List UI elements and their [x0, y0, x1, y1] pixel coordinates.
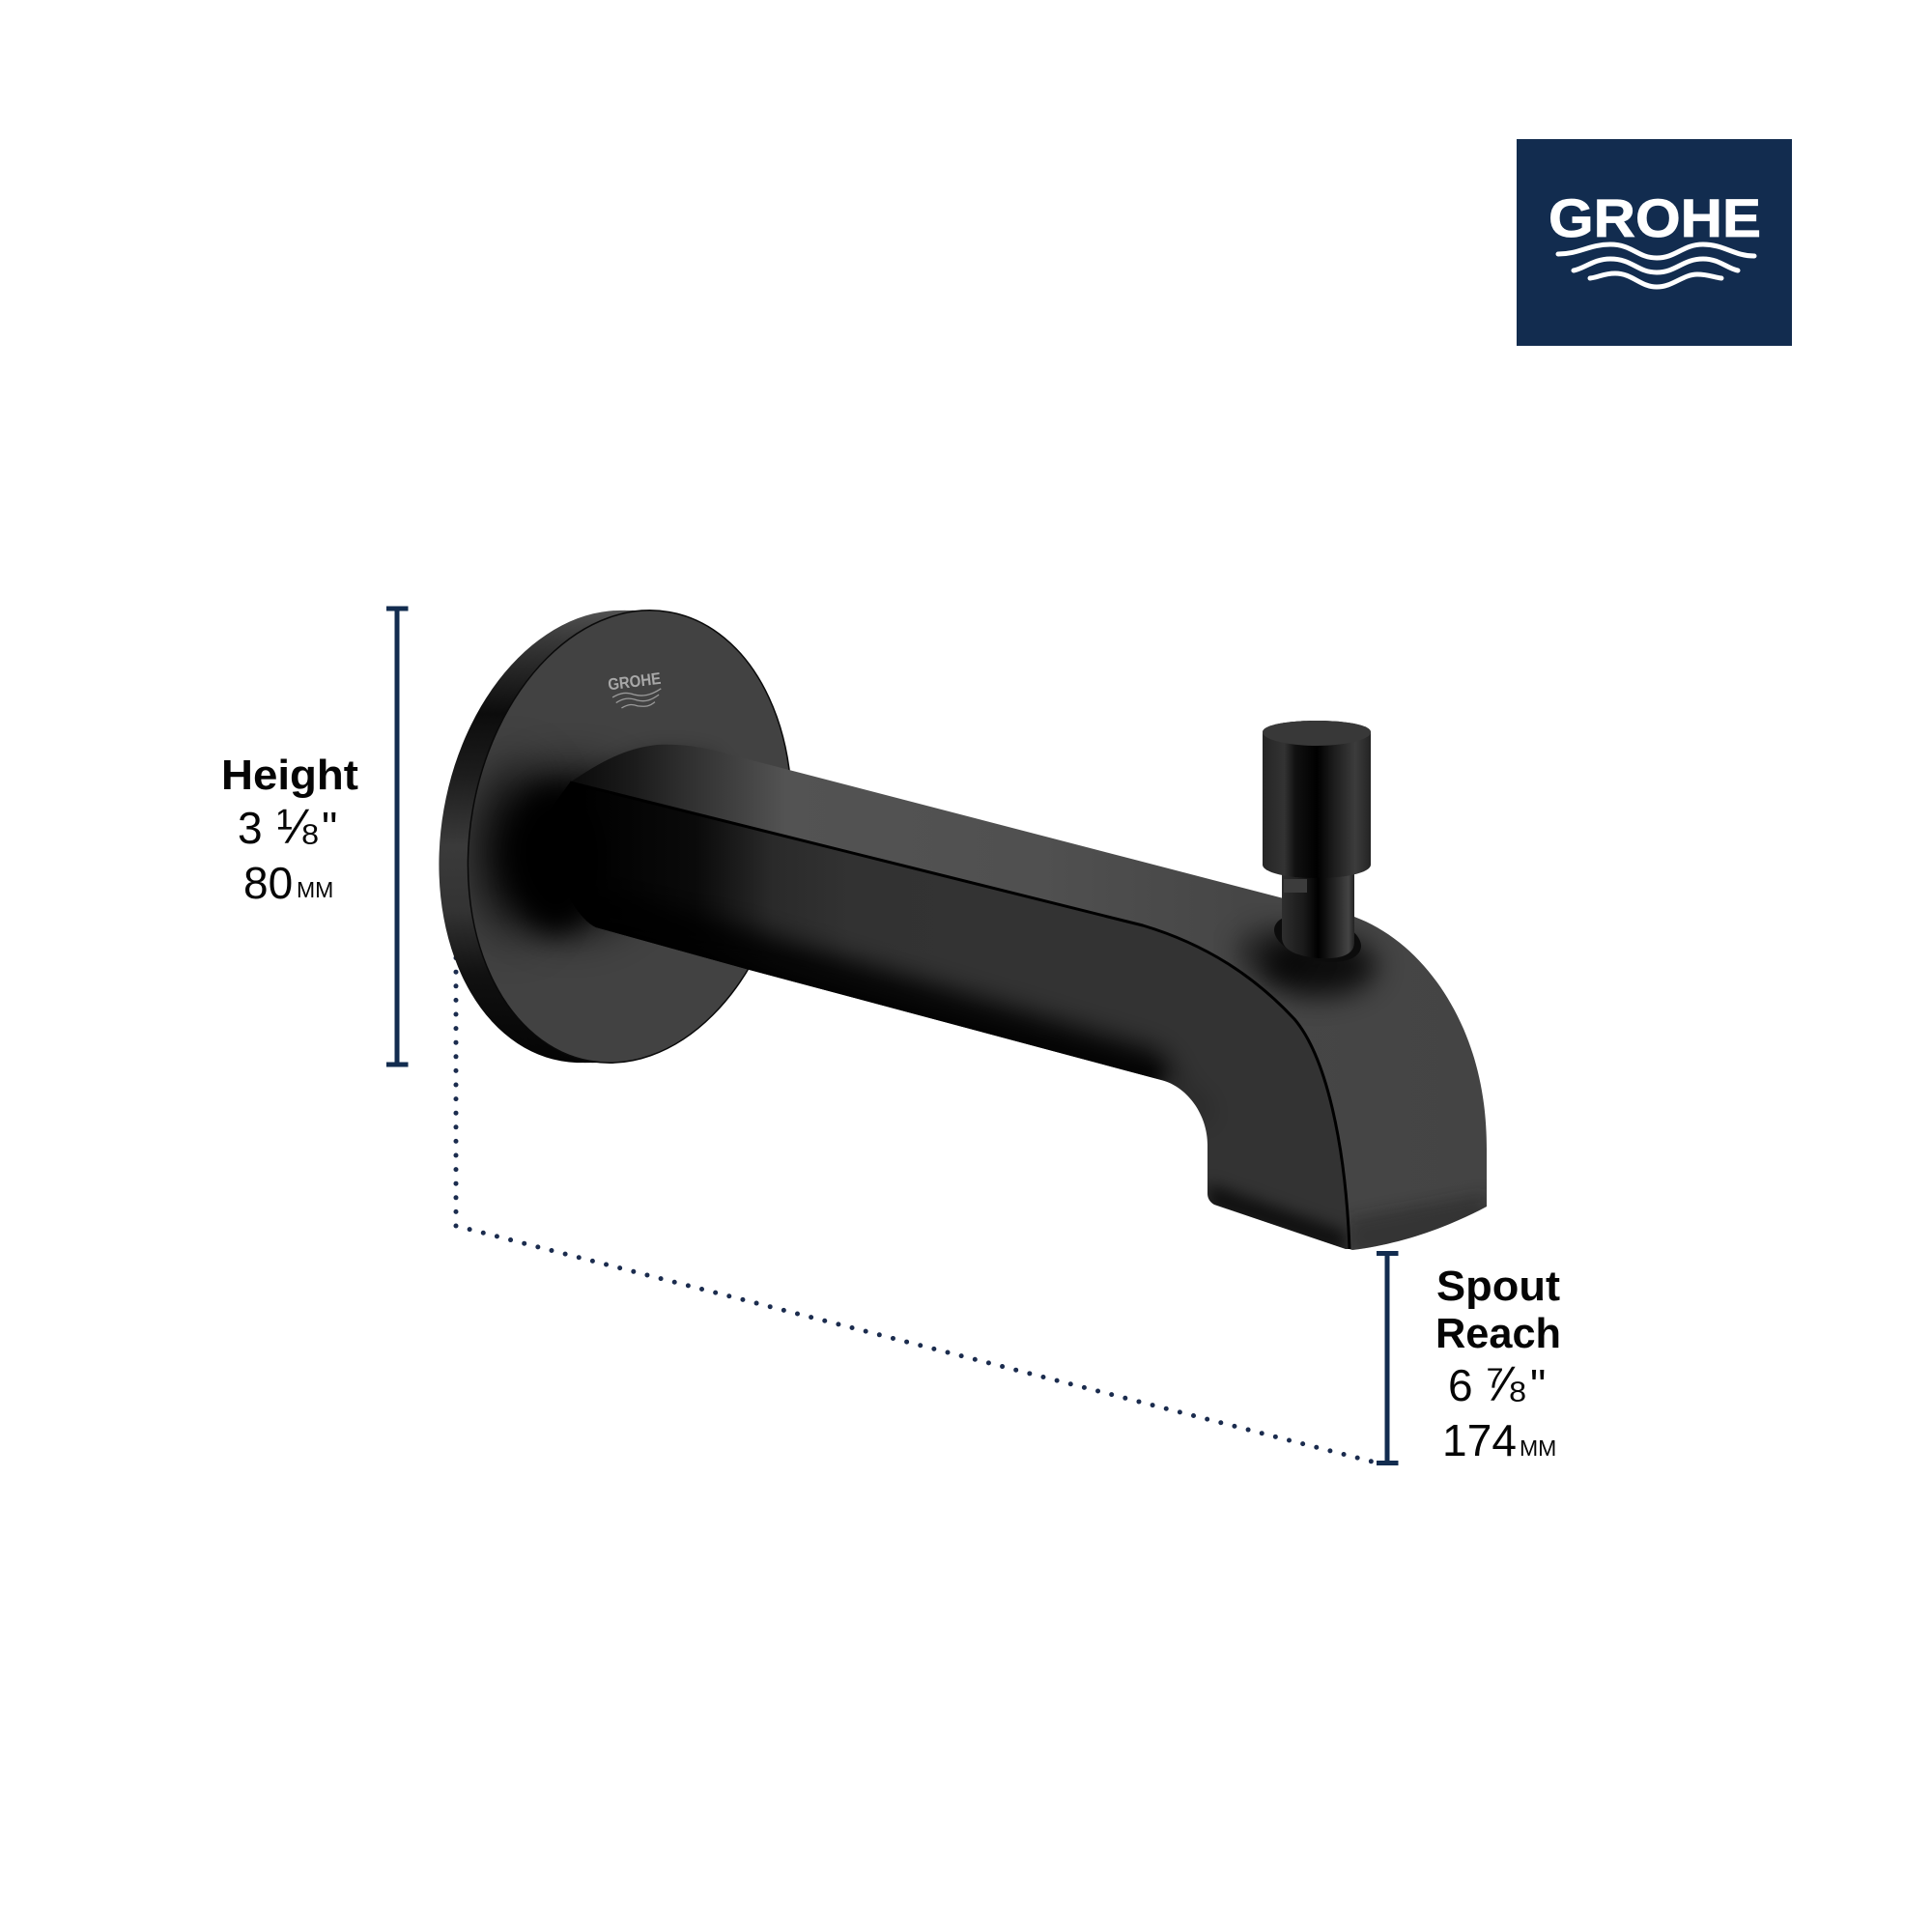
spout top and head face	[560, 734, 1507, 1275]
height label: 3	[238, 803, 263, 853]
spout reach label: 174	[1442, 1415, 1517, 1465]
spout side face	[564, 782, 1349, 1249]
dotted spout reach guide	[456, 944, 1376, 1463]
diverter knob body	[1263, 721, 1371, 878]
spout reach label: Reach	[1435, 1311, 1561, 1357]
disc engraved logo: GROHE	[607, 669, 662, 694]
spout reach label: ⅞	[1484, 1356, 1525, 1411]
logo wordmark: GROHE	[1548, 187, 1761, 248]
diverter stem highlight notch	[1284, 879, 1307, 893]
disc engraved logo	[607, 669, 664, 711]
height dimension bracket	[386, 607, 408, 1066]
height label: ⅛	[276, 799, 318, 854]
spout ridge line	[570, 782, 1350, 1249]
height label: "	[322, 803, 337, 853]
wall disc face	[434, 584, 826, 1089]
height label: 80	[243, 858, 293, 908]
spout reach label	[1435, 1264, 1561, 1465]
wall disc rim	[405, 584, 820, 1089]
spout reach dimension bracket	[1377, 1251, 1399, 1465]
spout reach label: 6	[1448, 1360, 1473, 1410]
height label	[221, 753, 358, 908]
spout reach label: "	[1530, 1360, 1546, 1410]
logo waves	[1558, 244, 1754, 287]
soft blend of spout base into disc shadow	[519, 788, 587, 942]
spout reach label: MM	[1520, 1435, 1556, 1461]
diverter collar hole	[1269, 906, 1366, 970]
height label: MM	[297, 877, 333, 902]
spout reach label: Spout	[1436, 1264, 1560, 1310]
disc shadow around spout base	[469, 747, 629, 953]
height label: Height	[221, 753, 358, 799]
diverter knob top	[1263, 721, 1371, 746]
tub spout product illustration	[439, 610, 1487, 1250]
diverter stem	[1282, 869, 1354, 958]
logo: GROHE badge	[1517, 139, 1792, 346]
